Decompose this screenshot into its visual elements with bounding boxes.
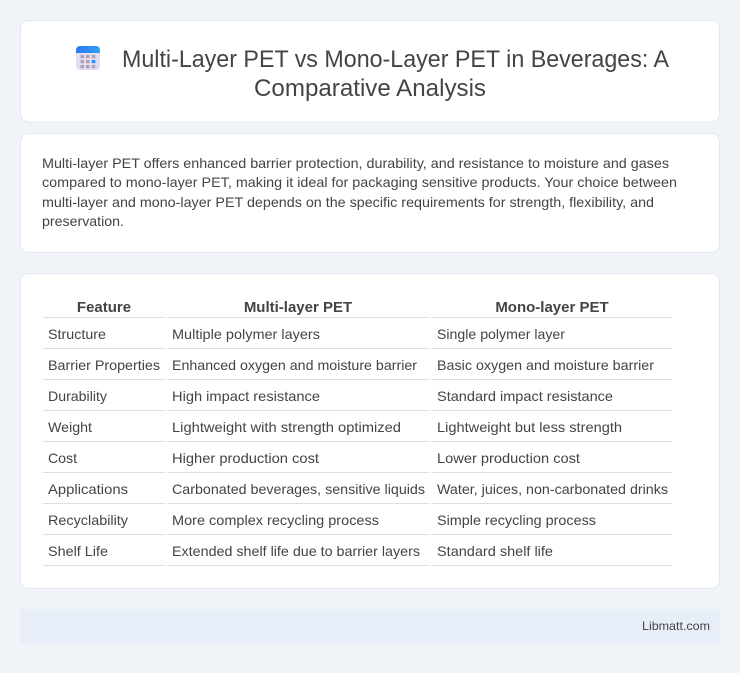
row: Weight xyxy=(48,419,622,435)
row: Recyclability xyxy=(48,512,596,528)
title: Comparative Analysis xyxy=(254,75,486,102)
table header: Feature xyxy=(77,299,131,316)
footer text: Libmatt.com xyxy=(642,619,710,633)
title: Multi-Layer PET vs Mono-Layer PET in Beverages: A xyxy=(122,46,669,73)
row: Applications: Applications xyxy=(48,481,128,497)
text block: summary xyxy=(42,155,677,229)
row: Weight: Lightweight but less strength xyxy=(437,419,622,435)
row: Recyclability: Simple recycling process xyxy=(437,512,596,528)
row: Cost: Lower production cost xyxy=(437,450,580,466)
table header xyxy=(77,299,609,316)
row: Barrier Properties: Basic oxygen and moisture barrier xyxy=(437,357,654,373)
title xyxy=(122,46,669,102)
row: Weight: Weight xyxy=(48,419,92,435)
row: Cost: Cost xyxy=(48,450,77,466)
row: Durability: Standard impact resistance xyxy=(437,388,613,404)
row: Shelf Life xyxy=(48,543,553,559)
row: Structure: Multiple polymer layers xyxy=(172,326,320,342)
row: Shelf Life: Standard shelf life xyxy=(437,543,553,559)
row: Barrier Properties xyxy=(48,357,654,373)
row: Durability: High impact resistance xyxy=(172,388,320,404)
row: Shelf Life: Extended shelf life due to barrier layers xyxy=(172,543,420,559)
row: Structure xyxy=(48,326,565,342)
row: Barrier Properties: Barrier Properties xyxy=(48,357,160,373)
row: Applications: Carbonated beverages, sensitive liquids xyxy=(172,481,425,497)
panel: comparison table xyxy=(20,274,720,588)
row: Shelf Life: Shelf Life xyxy=(48,543,108,559)
footer bar xyxy=(20,609,720,643)
row: Durability xyxy=(48,388,613,404)
row: Structure: Structure xyxy=(48,326,106,342)
text block: summary: multi-layer and mono-layer PET depends on the specific requirements for strength, flexibility, and xyxy=(42,194,654,210)
row: Recyclability: More complex recycling process xyxy=(172,512,379,528)
row: Applications xyxy=(48,481,668,497)
row: Cost xyxy=(48,450,580,466)
panel: title header xyxy=(20,20,720,122)
row: Cost: Higher production cost xyxy=(172,450,319,466)
text block: summary: preservation. xyxy=(42,213,124,229)
row: Durability: Durability xyxy=(48,388,107,404)
text block: summary: Multi-layer PET offers enhanced barrier protection, durability, and resistance to moisture and gases xyxy=(42,155,669,171)
row: Structure: Single polymer layer xyxy=(437,326,565,342)
row: Weight: Lightweight with strength optimized xyxy=(172,419,401,435)
icon: calendar xyxy=(76,46,100,70)
panel: summary text xyxy=(20,134,720,252)
row: Recyclability: Recyclability xyxy=(48,512,128,528)
text block: summary: compared to mono-layer PET, making it ideal for packaging sensitive products. Your choice between xyxy=(42,174,677,190)
table header: Multi-layer PET xyxy=(244,299,352,316)
row: Barrier Properties: Enhanced oxygen and moisture barrier xyxy=(172,357,417,373)
row: Applications: Water, juices, non-carbonated drinks xyxy=(437,481,668,497)
table header: Mono-layer PET xyxy=(495,299,609,316)
